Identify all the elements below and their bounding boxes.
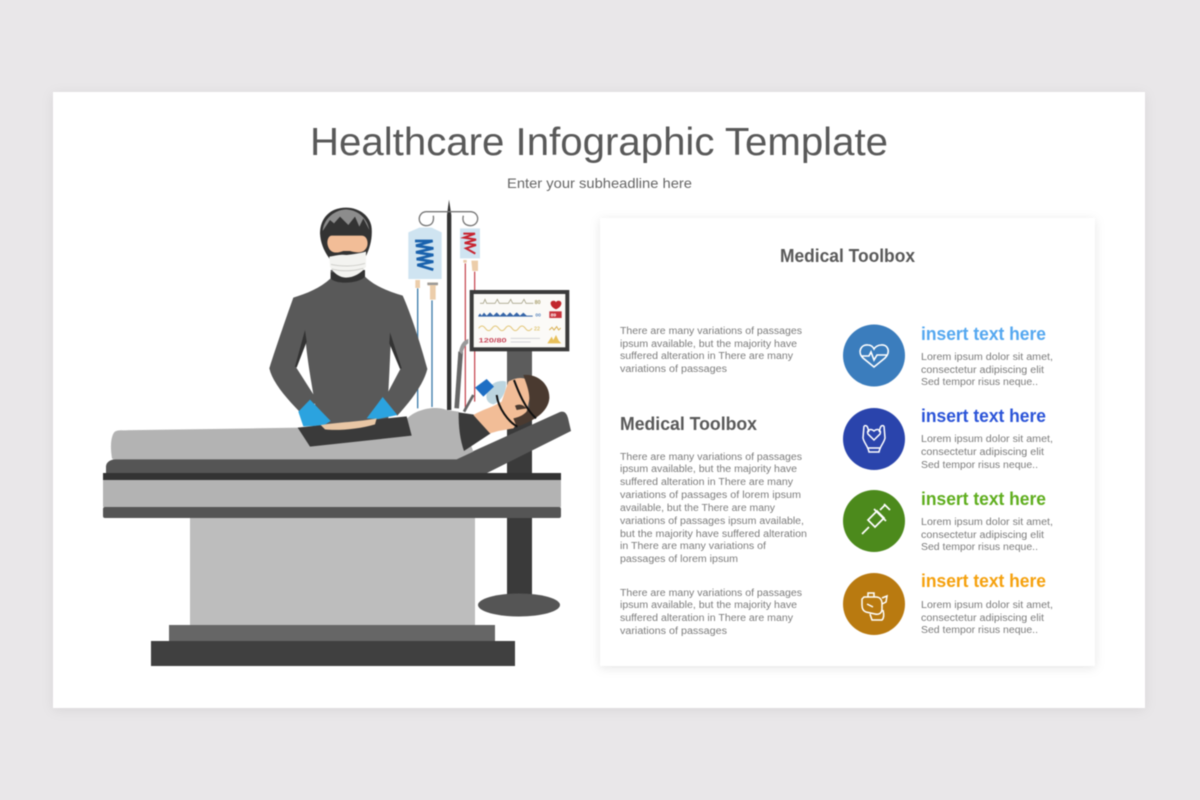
goggles face [327, 236, 368, 253]
paragraph 1 [620, 326, 802, 375]
item 4: medical bag: consectetur adipiscing elit [921, 613, 1044, 624]
neck and face [473, 378, 532, 433]
item 2: caring hands [843, 406, 1053, 471]
paragraph 3 [620, 588, 802, 637]
paragraph 1: There are many variations of passages [620, 326, 802, 337]
paragraph 3: There are many variations of passages [620, 588, 802, 599]
bed rail bottom [103, 507, 561, 518]
paragraph 2: available, but the There are many [620, 503, 775, 514]
IV pole with bags [408, 200, 480, 410]
item 1: heart rate: Sed tempor risus neque.. [921, 377, 1038, 388]
paragraph 1: variations of passages [620, 364, 727, 375]
title: Healthcare Infographic Template [310, 121, 888, 164]
item 2: caring hands: consectetur adipiscing elit [921, 447, 1044, 458]
paragraph 1: ipsum available, but the majority have [620, 339, 797, 350]
bed frame [103, 480, 561, 507]
item 1: heart rate: insert text here [921, 324, 1046, 344]
item 3: syringe: Sed tempor risus neque.. [921, 542, 1038, 553]
sheet collar [482, 431, 505, 442]
item 4: medical bag: Lorem ipsum dolor sit amet, [921, 600, 1053, 611]
item 4: medical bag: Sed tempor risus neque.. [921, 625, 1038, 636]
icon: medical kit [843, 573, 905, 635]
oxygen mask [486, 381, 506, 404]
icon: syringe [843, 490, 905, 552]
monitor stand [478, 348, 560, 616]
item 3: syringe: consectetur adipiscing elit [921, 530, 1044, 541]
patient chest [459, 412, 491, 451]
vital signs monitor: 89 [551, 313, 556, 319]
item 1: heart rate: consectetur adipiscing elit [921, 365, 1044, 376]
panel: medical toolbox card [600, 218, 1095, 666]
gloves [298, 400, 331, 426]
illustration: patient on hospital bed with doctor [103, 200, 571, 666]
left arm gap [296, 342, 313, 394]
item 2: caring hands: insert text here [921, 406, 1046, 426]
vital signs monitor [470, 290, 569, 351]
paragraph 2: passages of lorem ipsum [620, 554, 738, 565]
item 4: medical bag [843, 571, 1053, 636]
item 4: medical bag: insert text here [921, 571, 1046, 591]
card heading: Medical Toolbox [780, 246, 915, 266]
base upper [169, 625, 495, 641]
patient torso and legs [111, 408, 473, 459]
right arm gap [388, 343, 401, 392]
paragraph 2: suffered alteration in There are many [620, 477, 793, 488]
item 3: syringe: Lorem ipsum dolor sit amet, [921, 517, 1053, 528]
vital signs monitor: 00 [535, 313, 541, 319]
left heading: Medical Toolbox [620, 414, 757, 434]
vital signs monitor: 120/80 [479, 337, 507, 344]
item 2: caring hands: Lorem ipsum dolor sit amet, [921, 434, 1053, 445]
doctor [269, 208, 427, 428]
patient body under sheet [111, 375, 549, 459]
paragraph 3: variations of passages [620, 626, 727, 637]
item 3: syringe: insert text here [921, 489, 1046, 509]
paragraph 2: ipsum available, but the majority have [620, 464, 797, 475]
slide panel [53, 92, 1145, 708]
paragraph 2: but the majority have suffered alteration [620, 529, 807, 540]
paragraph 1: suffered alteration in There are many [620, 351, 793, 362]
icon: hands holding heart [843, 408, 905, 470]
hood [320, 208, 372, 262]
doctor gown [269, 270, 427, 428]
vital signs monitor: 80 [535, 300, 541, 306]
paragraph 3: ipsum available, but the majority have [620, 600, 797, 611]
paragraph 3: suffered alteration in There are many [620, 613, 793, 624]
bed rail top [103, 473, 561, 480]
paragraph 2: in There are many variations of [620, 541, 766, 552]
bed pedestal [190, 518, 475, 625]
item 3: syringe [843, 489, 1053, 553]
vital signs monitor: 22 [534, 327, 540, 333]
item 1: heart rate [843, 324, 1053, 388]
paragraph 2 [620, 452, 807, 565]
hair [513, 375, 549, 427]
subheadline: Enter your subheadline here [507, 175, 692, 191]
paragraph 2: There are many variations of passages [620, 452, 802, 463]
item 2: caring hands: Sed tempor risus neque.. [921, 460, 1038, 471]
paragraph 2: variations of passages ipsum available, [620, 516, 804, 527]
base lower [151, 641, 515, 666]
icon: heartbeat [843, 324, 905, 386]
bed mattress and backrest [106, 412, 571, 473]
arm and incision [298, 416, 412, 447]
mask [329, 252, 366, 278]
item 1: heart rate: Lorem ipsum dolor sit amet, [921, 352, 1053, 363]
breathing tube [457, 339, 468, 408]
paragraph 2: variations of passages of lorem ipsum [620, 490, 801, 501]
